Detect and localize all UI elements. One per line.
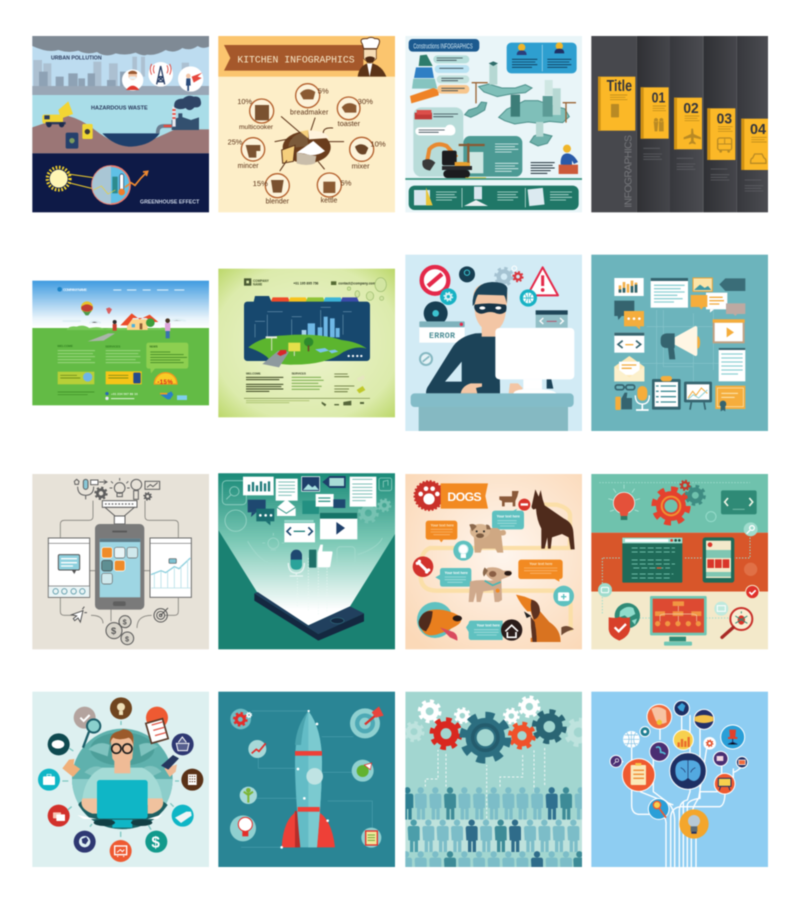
connector lines <box>60 501 178 628</box>
logo badge <box>414 481 444 510</box>
footer <box>58 391 187 400</box>
bubble: teal bottom <box>466 621 503 640</box>
panel: freelancer <box>32 692 209 867</box>
hacker figure <box>426 282 523 393</box>
icon: email badge left <box>598 583 612 597</box>
image card <box>693 278 712 291</box>
panel: urban pollution <box>32 36 209 95</box>
city skyline <box>302 317 340 337</box>
portrait: dog head <box>417 602 462 641</box>
icon: clipboard badge <box>146 707 168 743</box>
icon: target <box>350 706 384 738</box>
row 3 people <box>404 850 582 868</box>
pie chart <box>282 130 331 165</box>
panel: gears and people <box>404 691 583 868</box>
speech bubbles <box>691 293 745 316</box>
logo and nav <box>57 287 184 292</box>
icon: magnifier badge <box>648 799 669 819</box>
smartphone <box>254 592 364 641</box>
card: 03: 03 <box>717 112 732 128</box>
bubble: teal bottom: Your text here <box>477 623 500 627</box>
icon: brain badge <box>670 753 706 789</box>
panel: city website <box>218 269 395 417</box>
icon: fingerprint <box>424 301 448 325</box>
text columns: WELCOME <box>57 344 73 348</box>
icon: bricklayer <box>531 145 578 174</box>
icon: shield <box>609 617 630 641</box>
item: toaster: toaster <box>338 119 361 128</box>
icon: coins <box>106 616 134 645</box>
icon: small gear badge <box>640 727 650 737</box>
icon: chart easel <box>684 382 712 410</box>
bubble: orange right <box>518 560 563 582</box>
top line icons <box>74 478 160 499</box>
icon: barrels <box>66 124 93 149</box>
bubble: orange right: Your text here <box>529 562 553 566</box>
icon: sun <box>47 167 98 190</box>
banner: dogs <box>441 483 488 509</box>
icon: factory with smoke <box>158 96 201 133</box>
icon: chair badge <box>721 725 745 749</box>
icon: trend badge <box>248 740 266 758</box>
doberman <box>532 489 575 549</box>
tag <box>719 278 745 291</box>
outline gears <box>405 720 591 745</box>
desk <box>411 393 574 431</box>
card: 01: 01 <box>652 91 665 107</box>
icon: cursor <box>72 607 87 622</box>
icon: globe <box>520 289 537 307</box>
panel: constructions infographics <box>405 36 582 212</box>
card: 04: 04 <box>750 122 767 138</box>
smog clouds <box>32 36 209 55</box>
item: mixer: mixer <box>352 162 370 171</box>
icon: dump truck <box>42 101 73 127</box>
icon: person with mask <box>122 69 143 91</box>
circuit lines <box>633 310 720 390</box>
phone <box>95 524 144 610</box>
text columns: WELCOME <box>246 372 261 376</box>
icon: rosette <box>453 541 473 561</box>
stats panel <box>463 136 522 177</box>
icon: kite <box>106 307 112 314</box>
logo and contacts: contact@company.com <box>338 281 376 285</box>
dashed arrows <box>425 747 545 818</box>
item: blender: blender <box>266 198 290 205</box>
icon: presentation badge <box>110 840 132 862</box>
white gears <box>419 697 539 723</box>
logo and contacts: COMPANY <box>253 279 270 283</box>
panel: marketing icons <box>591 255 768 431</box>
hills <box>67 326 169 330</box>
laptop <box>77 780 163 828</box>
icon: coins: $ <box>125 634 129 643</box>
heading: hazardous waste: HAZARDOUS WASTE <box>91 105 148 111</box>
panel: dark columns infographic <box>591 36 768 212</box>
light beam <box>218 473 395 625</box>
thumbs up <box>309 545 333 568</box>
icon: link <box>615 385 635 390</box>
clouds <box>63 319 185 323</box>
heading: KITCHEN INFOGRAPHICS <box>237 54 355 65</box>
panel: hacker <box>405 255 582 431</box>
icon: clipboard <box>652 376 681 410</box>
error window: ERROR <box>429 331 455 341</box>
icon: media badge <box>713 751 728 766</box>
error window <box>419 321 465 343</box>
item: kettle: 5% <box>340 178 352 187</box>
item: mincer <box>228 137 265 170</box>
logo and contacts: +01 195 895 756 <box>293 281 319 285</box>
item: breadmaker <box>290 84 329 117</box>
item: blender <box>253 174 290 205</box>
promo boxes <box>58 371 142 384</box>
card: 01 <box>641 87 669 139</box>
icon: envelope badge <box>714 602 728 616</box>
browser window <box>622 538 682 583</box>
text columns: SERVICES <box>292 372 306 376</box>
icon: coins: $ <box>123 618 127 627</box>
winding path <box>421 505 571 631</box>
icon: small cog badge <box>703 737 716 750</box>
node dots <box>280 710 329 849</box>
icon: thumbs up <box>615 393 632 410</box>
isometric map <box>465 61 576 146</box>
icon: magnifier <box>83 719 100 748</box>
icon: lightbulb badge <box>110 697 132 719</box>
panel: greenhouse effect <box>32 153 209 212</box>
icon: web globe <box>623 731 640 748</box>
icon: collar badge <box>518 499 530 511</box>
row 2 people <box>408 819 579 852</box>
banner <box>224 45 363 71</box>
icon: small no sign <box>420 353 432 365</box>
icon: medical bag <box>553 586 574 606</box>
logo and contacts <box>244 278 376 287</box>
icon: dollar badge: $ <box>151 835 160 852</box>
small arrows <box>62 721 179 837</box>
rocket fins <box>282 811 335 847</box>
dotted connectors <box>599 483 750 618</box>
icon: basket badge <box>172 733 194 755</box>
icon: calculator badge <box>181 769 203 791</box>
discount badge <box>154 373 177 386</box>
speech panel: NEWS <box>150 344 158 348</box>
item: breadmaker: breadmaker <box>290 110 329 117</box>
icon: light bulb <box>608 485 640 520</box>
item: breadmaker: 5% <box>318 86 329 95</box>
video card <box>713 319 745 343</box>
icon: plant badge <box>240 787 257 804</box>
code card <box>614 333 644 353</box>
panel: idea tree <box>591 692 768 867</box>
hand with phone <box>161 755 179 777</box>
panel: rocket <box>218 692 395 867</box>
icon: settings badge <box>440 288 457 305</box>
text columns: SERVICES <box>105 344 120 348</box>
icon: dog house <box>501 619 522 641</box>
arrows from pie <box>275 117 344 171</box>
panel: smartphone funnel <box>32 474 209 649</box>
card: title: Title <box>607 78 632 95</box>
footer: +01 234 567 89 10 <box>111 392 138 396</box>
icon: megaphone <box>661 326 700 359</box>
document <box>719 348 745 381</box>
icon: warning <box>527 267 558 295</box>
icon: coins: $ <box>111 626 117 636</box>
panel: hazardous waste <box>32 95 209 153</box>
item: multicooker <box>237 97 274 131</box>
workers box <box>507 42 577 73</box>
character <box>82 729 162 805</box>
color tabs <box>254 296 359 302</box>
item: mixer <box>350 137 386 171</box>
bubble: orange left: Your text here <box>431 523 454 527</box>
icon: chef <box>358 37 386 77</box>
bubble: orange left <box>426 521 457 542</box>
bubble: teal left <box>435 568 471 587</box>
faint captions <box>643 148 763 191</box>
item: toaster <box>337 97 373 128</box>
big circle <box>72 729 173 829</box>
icon: key badge <box>459 266 475 282</box>
footer icons <box>246 401 364 406</box>
item: toaster: 30% <box>358 97 373 106</box>
icon: piggy bank badge <box>48 733 70 755</box>
road <box>262 351 289 367</box>
phone app tiles <box>102 547 138 584</box>
icon: gears <box>654 481 716 523</box>
path <box>88 333 115 341</box>
code card <box>284 520 315 542</box>
envelope <box>277 499 296 516</box>
document card <box>651 278 688 308</box>
item: mixer: 10% <box>370 140 386 149</box>
item: kettle <box>317 173 352 205</box>
icon: price tag badge <box>172 805 194 827</box>
image card <box>302 477 320 491</box>
icon: hand badge <box>647 704 672 729</box>
slider widget <box>721 490 757 514</box>
icon: magnifier with bug <box>722 608 752 637</box>
funnel <box>102 501 137 524</box>
code window <box>536 310 568 328</box>
pug <box>469 524 506 553</box>
video card <box>320 513 357 539</box>
item: kettle: kettle <box>321 198 337 205</box>
item: multicooker: 10% <box>237 97 252 106</box>
microphone <box>288 550 304 576</box>
logo and contacts: NAME <box>253 283 262 287</box>
bubble: your text top <box>492 509 524 531</box>
card: 04 <box>741 119 768 170</box>
item: blender: 15% <box>253 179 268 188</box>
logo and nav: COMPANY NAME <box>63 288 88 292</box>
icon: light bulb badge <box>230 815 256 841</box>
desktop monitor <box>650 596 707 646</box>
small brown dog <box>499 491 519 506</box>
icon: check badge <box>746 585 759 599</box>
icon: magnifier badge <box>744 522 758 536</box>
icon: clipboard badge <box>622 759 655 791</box>
left screen <box>48 538 90 597</box>
right screen <box>150 538 191 597</box>
text columns <box>57 344 140 363</box>
icon: handshake badge <box>694 709 714 729</box>
dotted beams <box>297 558 327 615</box>
icon: key badge <box>610 755 622 767</box>
icon: certificate <box>715 386 745 411</box>
text columns <box>246 372 365 393</box>
panel: dogs <box>405 474 582 649</box>
chat bubbles <box>248 494 345 525</box>
panel: phone hologram <box>218 473 395 649</box>
bar chart card <box>614 278 644 296</box>
icon: no entry <box>422 267 448 294</box>
site panel <box>413 107 463 177</box>
card: title <box>598 77 635 131</box>
icon: globe badge <box>74 831 96 853</box>
panel: green website with house <box>32 281 209 405</box>
icon: check badge <box>74 707 96 729</box>
bubble: teal left: Your text here <box>445 571 468 575</box>
icon: excavator <box>422 143 486 179</box>
icon: bone <box>413 556 433 577</box>
icon: person with red wind <box>178 66 203 92</box>
hand thumb up <box>62 759 80 777</box>
extra arms <box>84 743 162 780</box>
rocket body <box>295 711 323 847</box>
icon: gears <box>496 266 523 285</box>
icon: clipboard badge <box>361 828 381 848</box>
white tree branches <box>616 715 742 867</box>
pyramid <box>410 55 469 103</box>
details: sign, car, tree <box>266 337 362 357</box>
card: 02: 02 <box>683 101 699 117</box>
icon: microphone <box>635 386 649 410</box>
spotted dog <box>469 567 512 602</box>
icon: growth badge <box>673 730 693 750</box>
icon: globe <box>615 603 640 628</box>
bubble: your text top: Your text here <box>497 515 520 519</box>
row 1 people <box>401 787 587 820</box>
icon: cursor badge <box>650 742 669 761</box>
vertical label: INFOGRAPHICS <box>623 135 634 208</box>
monitor <box>495 328 574 394</box>
item: multicooker: multicooker <box>239 124 274 131</box>
item: mincer: mincer <box>238 163 259 170</box>
arrow: rising trend <box>125 171 148 187</box>
icon: briefcase badge <box>38 769 60 791</box>
icon: chat badge <box>48 805 70 827</box>
card: 02 <box>674 98 702 149</box>
icon: screen badge <box>736 757 748 768</box>
heading: urban pollution: URBAN POLLUTION <box>51 56 102 62</box>
icon: thermometer globe <box>92 166 130 204</box>
water drops <box>347 278 386 300</box>
icon: globe badge <box>674 701 689 716</box>
item: mincer: 25% <box>228 137 243 146</box>
caption: greenhouse effect: GREENHOUSE EFFECT <box>140 200 200 206</box>
speech panel <box>146 343 188 373</box>
tag <box>322 476 346 488</box>
icon: globe pointer badge <box>352 760 374 782</box>
icon: easel badge <box>714 773 735 794</box>
footer panel <box>409 186 579 210</box>
discount badge: -15% <box>157 380 173 386</box>
icon: hot air balloon <box>81 301 93 315</box>
title pill: Constructions INFOGRAPHICS <box>413 43 473 50</box>
chat bubbles <box>614 301 644 330</box>
icon: house <box>120 313 158 330</box>
panel: kitchen infographics <box>218 36 395 212</box>
orange dog <box>516 595 574 642</box>
icon: antenna tower <box>148 62 173 87</box>
figures <box>113 318 170 338</box>
document cards <box>276 477 376 507</box>
panel: web development <box>591 474 768 649</box>
icon: target <box>154 608 168 622</box>
banner: dogs: DOGS <box>447 490 482 504</box>
icon: dollar badge <box>145 831 167 853</box>
card: 03 <box>707 108 735 160</box>
bar chart card <box>243 477 274 495</box>
faint line icons <box>222 478 392 565</box>
icon: light bulb badge <box>679 809 709 839</box>
green landscape <box>248 335 367 365</box>
tablet <box>703 537 734 583</box>
main gears <box>463 712 564 760</box>
icon: envelope <box>614 356 644 381</box>
navy hero <box>244 302 370 361</box>
red gears <box>432 720 534 748</box>
title pill <box>409 39 479 52</box>
connector lines <box>241 711 372 847</box>
icon: gear badge <box>230 709 252 729</box>
